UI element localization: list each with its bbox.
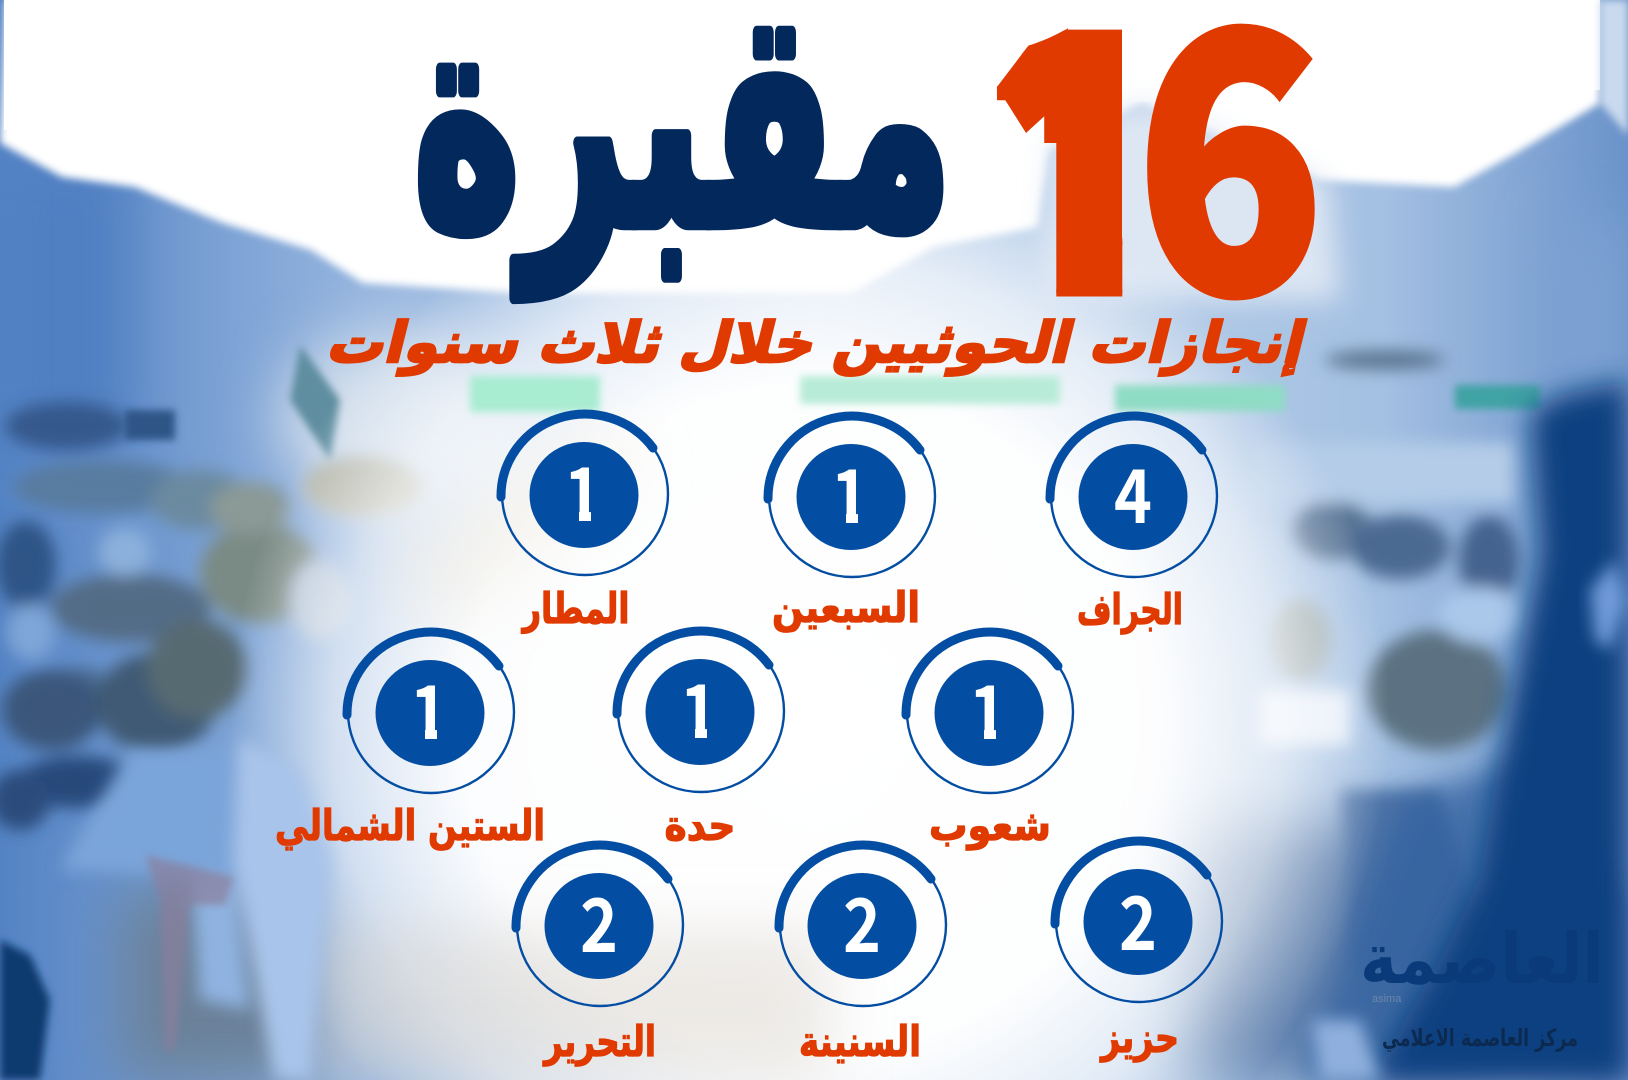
background: wooden frame	[145, 855, 234, 1050]
stat: حزيز: حزيز	[1099, 1013, 1179, 1063]
stat: المطار: المطار	[521, 584, 630, 633]
stat: حدة	[617, 630, 784, 850]
background: ground texture	[310, 420, 830, 1080]
stat: شعوب	[906, 631, 1073, 851]
stat: السنينة: 2	[843, 867, 881, 974]
stat: الستين الشمالي	[275, 631, 545, 851]
background: shading below figure	[1300, 760, 1628, 1080]
stat: حزيز	[1055, 840, 1222, 1063]
background: pale top right corner	[1600, 0, 1628, 135]
stat: السبعين	[768, 415, 935, 633]
stat: التحرير	[516, 844, 683, 1067]
background: bottom right patch	[1312, 1020, 1380, 1080]
stat: السبعين: السبعين	[772, 583, 920, 633]
background: highlight on figure	[1590, 560, 1628, 650]
stat: السبعين: 1	[831, 438, 869, 545]
stat: التحرير: 2	[580, 867, 618, 974]
background: crisp sky top	[4, 0, 1600, 130]
stat: الستين الشمالي: 1	[410, 654, 448, 761]
logo: asima	[1372, 993, 1402, 1005]
title number	[996, 24, 1315, 300]
background: green banners	[470, 376, 1540, 412]
stat: الجراف: الجراف	[1077, 585, 1183, 635]
stat: السنينة: السنينة	[799, 1017, 921, 1066]
stat: حدة: حدة	[664, 801, 736, 850]
stat: الستين الشمالي: الستين الشمالي	[275, 801, 545, 851]
stat: حزيز: 2	[1119, 865, 1157, 972]
background: pale haze behind number	[1040, 100, 1340, 300]
logo	[1360, 918, 1604, 1052]
stat: السنينة	[779, 844, 946, 1066]
stat: الجراف	[1050, 415, 1217, 635]
stat: التحرير: التحرير	[542, 1017, 656, 1067]
stat: المطار: 1	[564, 436, 602, 543]
logo: العاصمة	[1360, 918, 1604, 1000]
background: white sky	[0, 0, 1600, 293]
subtitle: إنجازات الحوثيين خلال ثلاث سنوات	[322, 311, 1313, 377]
stat: حدة: 1	[680, 653, 718, 760]
stat: شعوب: 1	[969, 654, 1007, 761]
background: dark figure at right	[1370, 380, 1628, 1080]
stat: الجراف: 4	[1114, 438, 1152, 545]
background: pale concrete strips	[60, 738, 332, 1080]
stat: شعوب: شعوب	[929, 801, 1051, 851]
stat: المطار	[501, 413, 668, 633]
background: glow body	[230, 160, 1390, 1080]
